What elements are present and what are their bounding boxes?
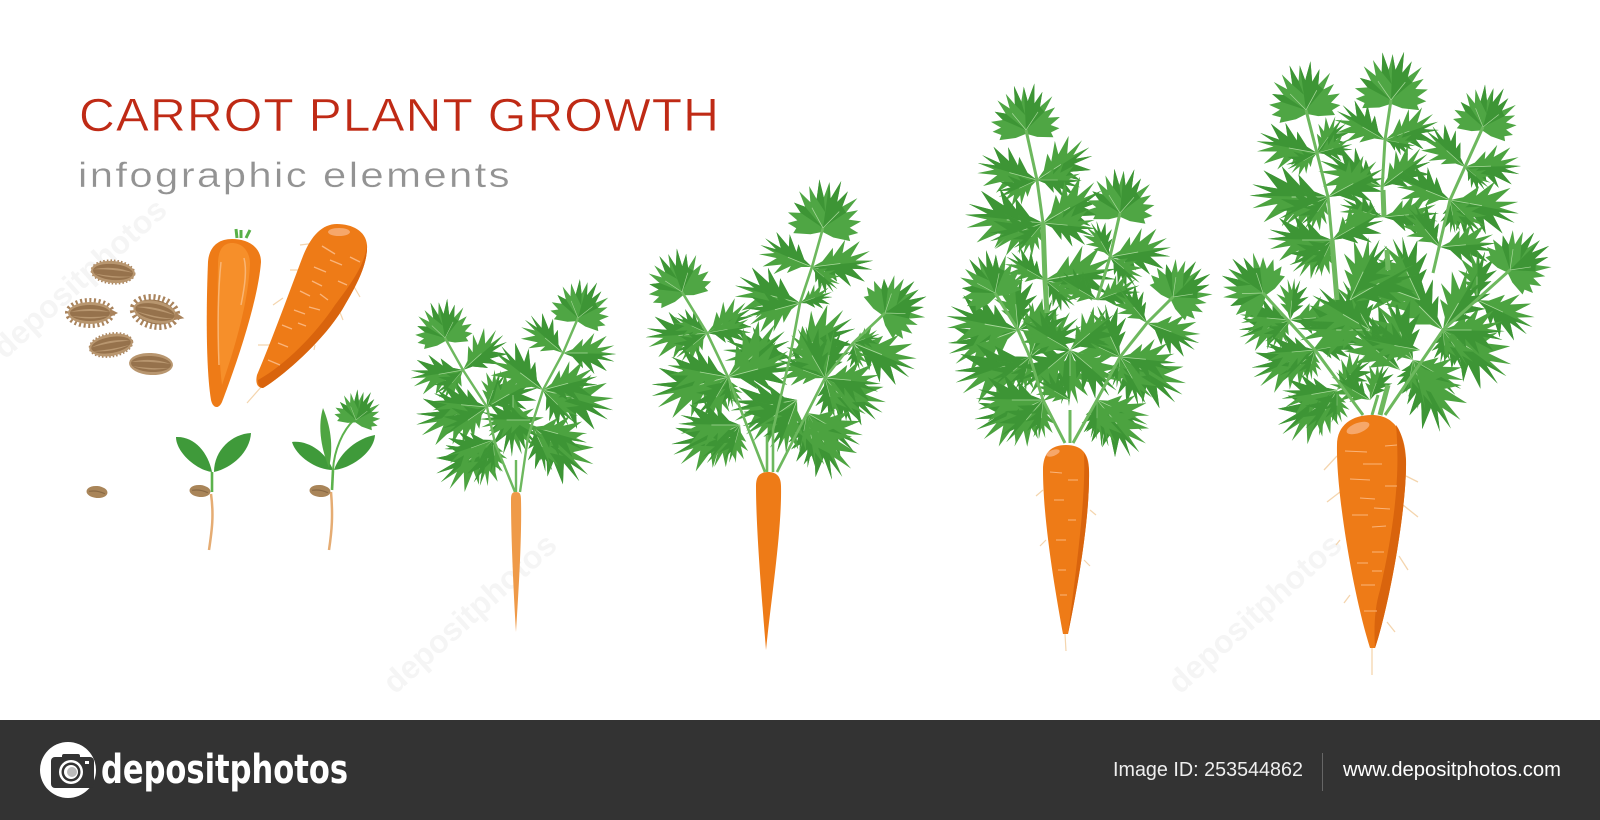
foliage xyxy=(637,174,939,490)
seed 2 xyxy=(68,301,118,325)
carrot xyxy=(1324,415,1418,675)
watermark xyxy=(0,191,1348,700)
stems xyxy=(995,130,1173,443)
whole carrot, front view xyxy=(207,229,261,407)
foliage xyxy=(1207,50,1565,455)
stage 5: growing plant xyxy=(637,174,939,650)
divider xyxy=(1322,753,1323,791)
watermark: depositphotos xyxy=(1161,526,1348,700)
stage 3: seedling with first true leaf xyxy=(292,384,386,550)
subtitle: infographic elements xyxy=(78,156,512,195)
stems xyxy=(682,228,885,472)
foliage xyxy=(940,82,1226,468)
seed 4 xyxy=(87,330,135,360)
website: www.depositphotos.com xyxy=(1342,758,1561,781)
seed 3 xyxy=(131,295,187,331)
stage 6: maturing plant xyxy=(940,82,1226,651)
icon: camera logo xyxy=(40,742,96,798)
stage 2: seedling with cotyledons xyxy=(176,433,251,550)
image id: Image ID: 253544862 xyxy=(1113,758,1303,781)
stage 7: mature plant xyxy=(1207,50,1565,675)
seeds group xyxy=(68,259,187,376)
footer bar xyxy=(0,720,1600,820)
title: CARROT PLANT GROWTH xyxy=(79,89,720,141)
stage 1: seed xyxy=(86,485,108,499)
foliage xyxy=(407,273,620,502)
taproot xyxy=(511,492,521,632)
watermark: depositphotos xyxy=(376,526,563,700)
logo wordmark: depositphotos xyxy=(101,747,348,793)
carrot xyxy=(756,472,781,650)
stage 4: young plant xyxy=(407,273,620,632)
whole carrot, diagonal view xyxy=(247,224,367,403)
carrot xyxy=(1036,445,1096,651)
seed 5 xyxy=(128,352,174,376)
seed 1 xyxy=(90,259,136,285)
stems xyxy=(1263,100,1510,415)
stems xyxy=(445,318,578,492)
